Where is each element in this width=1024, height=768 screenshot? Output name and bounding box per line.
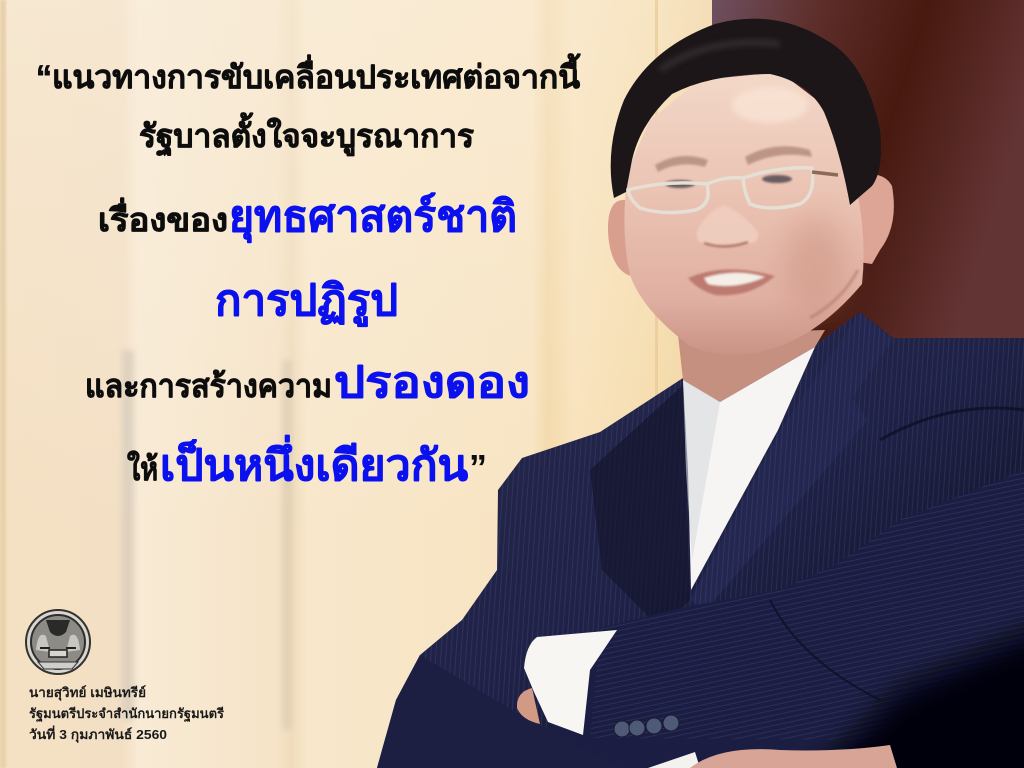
quote line 1: “แนวทางการขับเคลื่อนประเทศต่อจากนี้ [36, 53, 581, 95]
glasses [628, 168, 838, 213]
left hand [517, 688, 540, 724]
closing quote mark: ” [469, 447, 487, 488]
left lower sleeve [377, 655, 620, 768]
hair [611, 19, 881, 205]
shirt cuff [524, 630, 617, 735]
eyes [665, 175, 792, 188]
quote line 6: ให้ [127, 450, 158, 487]
suit jacket [377, 312, 1024, 768]
highlight: reform: การปฏิรูป [215, 277, 398, 327]
neck shadow on shirt [683, 380, 720, 560]
left ear [608, 200, 630, 276]
cheek and forehead shading [732, 87, 858, 318]
face [624, 72, 864, 355]
forearm sleeve [525, 470, 1024, 768]
photo: man in pinstripe suit [377, 19, 1024, 768]
highlight: united as one: เป็นหนึ่งเดียวกัน [160, 435, 469, 490]
date: วันที่ 3 กุมภาพันธ์ 2560 [29, 725, 167, 743]
quote text block [36, 53, 581, 490]
hair highlight [660, 42, 780, 70]
pocket crease on sleeve [770, 600, 880, 700]
lower cuff and hand [648, 745, 897, 768]
quote line 2: รัฐบาลตั้งใจจะบูรณาการ [139, 112, 474, 157]
quote line 3: เรื่องของ [98, 197, 228, 238]
highlight: national strategy: ยุทธศาสตร์ชาติ [229, 192, 517, 244]
sleeve buttons [614, 715, 679, 737]
nose [697, 205, 758, 247]
sleeve pinstripes [590, 470, 1024, 740]
dark shadow under right arm [790, 600, 1024, 768]
white shirt [683, 347, 815, 590]
position: รัฐมนตรีประจำสำนักนายกรัฐมนตรี [29, 706, 224, 723]
quote line 5: และการสร้างความ [85, 368, 332, 404]
name: นายสุวิทย์ เมษินทรีย์ [29, 685, 146, 701]
highlight: reconciliation: ปรองดอง [334, 359, 530, 407]
icon: government seal [26, 610, 90, 674]
neck [678, 330, 825, 402]
wood wall behind the man [712, 0, 1024, 345]
eyebrows [655, 146, 812, 172]
signature block [29, 685, 224, 743]
right ear [853, 174, 894, 264]
mouth [688, 269, 775, 295]
